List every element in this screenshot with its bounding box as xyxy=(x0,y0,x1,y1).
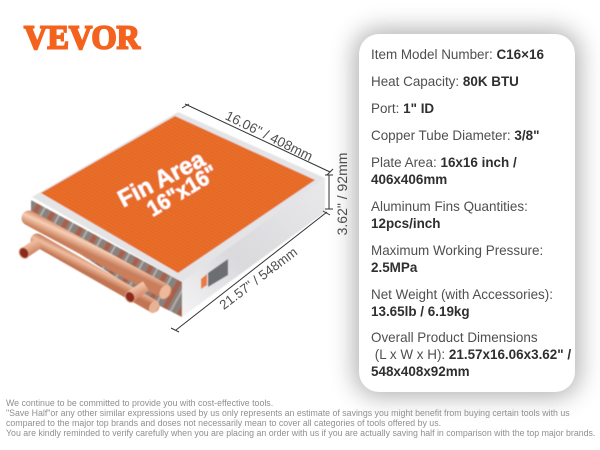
top frame xyxy=(32,112,325,282)
front fin face xyxy=(31,200,182,317)
dimension: width xyxy=(182,104,333,175)
left stub pipe xyxy=(24,243,39,253)
lower copper tube xyxy=(37,240,153,306)
dimension: length xyxy=(171,211,330,332)
fin area text: 16"x16" xyxy=(142,160,222,221)
spec: net weight: Net Weight (with Accessories): 13.65lb / 6.19kg xyxy=(371,287,553,319)
fin area xyxy=(41,116,315,273)
dimension: length: 21.57" / 548mm xyxy=(216,244,300,313)
spec: fin quantities: Aluminum Fins Quantities: 12pcs/inch xyxy=(371,199,528,231)
dimension: height xyxy=(325,153,350,235)
spec: heat capacity: Heat Capacity: 80K BTU xyxy=(371,74,519,89)
spec: port: Port: 1" ID xyxy=(371,101,434,116)
spec: model number: Item Model Number: C16×16 xyxy=(371,47,544,62)
right stub pipe xyxy=(131,286,146,296)
label sticker xyxy=(201,259,228,289)
footer disclaimer: We continue to be committed to provide you with cost-effective tools. "Save Half"or any other similar expressions used by us only represents an estimate of savings you might benefit from buying certain tools with us compared to the major top brands and doses not necessarily mean to cover all categories of tools offered by us. You are kindly reminded to verify carefully when you are placing an order with us if you are actually saving half in comparison with the top major brands. xyxy=(6,398,595,438)
spec: plate area: Plate Area: 16x16 inch / 406x406mm xyxy=(371,155,517,187)
logo: VEVOR: VEVOR xyxy=(24,20,140,56)
side panel xyxy=(182,178,325,317)
fin area text: Fin Area xyxy=(114,145,210,213)
dimension: height: 3.62" / 92mm xyxy=(334,153,350,235)
upper copper tube xyxy=(29,218,164,291)
dimension: width: 16.06" / 408mm xyxy=(223,108,315,164)
spec: working pressure: Maximum Working Pressure: 2.5MPa xyxy=(371,243,543,275)
product: copper heat exchanger xyxy=(17,112,325,317)
spec: overall dimensions: Overall Product Dimensions (L x W x H): 21.57x16.06x3.62" / 548x408x92mm xyxy=(371,330,571,379)
spec: copper tube diameter: Copper Tube Diameter: 3/8" xyxy=(371,128,539,143)
panel: specifications xyxy=(359,34,575,392)
